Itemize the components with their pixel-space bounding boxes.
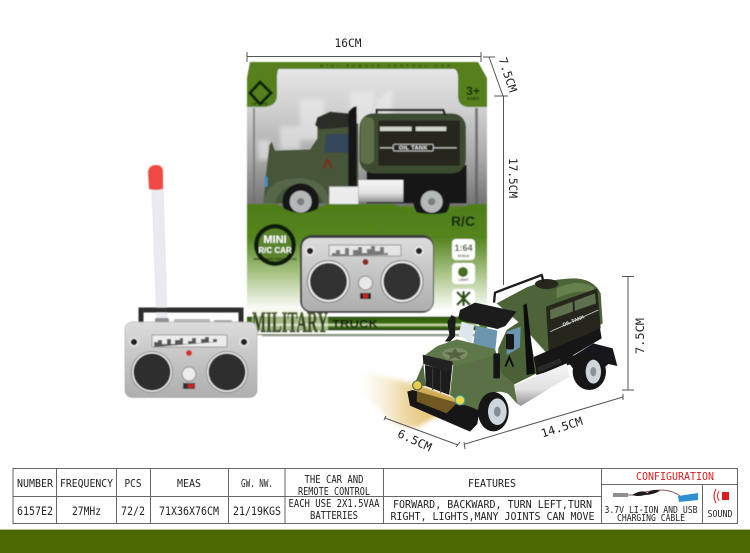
- value: number: 6157E2: [17, 504, 53, 518]
- badge caption: MINI REMOTE CONTROL CAR: [254, 257, 297, 261]
- cab roof: [315, 112, 357, 129]
- roof rail: [494, 275, 544, 303]
- scale badge: [452, 239, 475, 260]
- tank lid: [535, 279, 558, 289]
- window side strips: [253, 108, 255, 204]
- oil tank side label: OIL TANK: [562, 314, 586, 329]
- left green nose: [413, 363, 426, 387]
- top buttons: [174, 319, 210, 326]
- boxed remote led: [362, 259, 368, 265]
- battery note: REMOTE CONTROL: [298, 485, 370, 498]
- truck title: TRUCK: [332, 318, 378, 330]
- silver fuel tank: [358, 180, 403, 202]
- grille: [423, 355, 453, 395]
- door army emblem: [505, 357, 513, 367]
- remote body: [125, 322, 257, 398]
- star emblem: [442, 348, 468, 360]
- value: meas: 71X36X76CM: [159, 504, 219, 518]
- dimension: box depth 7.5CM: [483, 55, 520, 96]
- dimension: box width 16CM: [247, 36, 481, 62]
- handheld remote control: [125, 165, 257, 398]
- features text: RIGHT, LIGHTS,MANY JOINTS CAN MOVE: [390, 510, 594, 523]
- header: frequency: FREQUENCY: [60, 477, 113, 490]
- tank: [497, 278, 603, 355]
- exhaust stack: [523, 303, 535, 375]
- label: 14.5CM: [539, 414, 584, 440]
- skyline silhouettes: [258, 88, 392, 160]
- sound label: SOUND: [708, 509, 732, 520]
- joystick: [182, 367, 196, 381]
- dimension: truck height 7.5CM: [622, 276, 647, 390]
- exhaust stack: [348, 106, 357, 197]
- cab fender: [263, 178, 330, 203]
- front fender: [450, 349, 517, 417]
- boxed truck window: [324, 134, 348, 153]
- age text: 3+: [466, 84, 480, 98]
- bottom green band: [0, 529, 750, 553]
- left knob: [130, 338, 138, 346]
- channels badge: [452, 289, 475, 309]
- boxed remote small knobs: [306, 247, 314, 255]
- tank cage: [546, 288, 601, 351]
- RC label: R/C: [451, 213, 475, 229]
- icon: charging cable and battery: [613, 490, 698, 502]
- top flap text: MINI REMOTE CONTROL CAR: [320, 64, 450, 68]
- label: 6.5CM: [395, 426, 434, 454]
- cable caption: [604, 505, 698, 524]
- equalizer display: [152, 335, 227, 347]
- red led: [186, 350, 192, 356]
- box bottom shadow: [262, 335, 482, 336]
- header: number: NUMBER: [17, 477, 53, 490]
- antenna base: [155, 318, 169, 326]
- header: features: FEATURES: [468, 477, 516, 490]
- front wheel: [478, 392, 509, 431]
- label: 7.5CM: [633, 318, 647, 354]
- white area below panel: [247, 316, 479, 334]
- truck title backing: [252, 309, 328, 333]
- hood: [425, 339, 497, 366]
- cable caption: 3.7V LI-ION AND USB: [604, 505, 698, 516]
- mini rc car badge: [254, 224, 296, 266]
- cable caption: CHARGING CABLE: [617, 513, 685, 524]
- boxed rear wheel: [413, 183, 450, 220]
- box top flap and front: [247, 62, 487, 335]
- left speaker: [132, 352, 172, 392]
- icon: red speaker: [714, 489, 729, 503]
- truck rear frame: [567, 343, 617, 373]
- fuel tank straps: [537, 358, 562, 373]
- value: pcs: 72/2: [121, 504, 145, 518]
- label: 17.5CM: [506, 158, 520, 198]
- battery note: BATTERIES: [310, 509, 358, 522]
- boxed remote joystick: [358, 276, 372, 290]
- right headlight: [455, 396, 465, 405]
- cab roof: [458, 303, 517, 329]
- tank roof rail: [377, 110, 445, 115]
- features text: [390, 498, 594, 523]
- boxed truck tank: [359, 113, 466, 173]
- battery note: THE CAR AND: [304, 473, 364, 486]
- boxed remote left speaker: [308, 260, 350, 302]
- right speaker: [206, 352, 248, 392]
- battery note: [288, 473, 380, 522]
- battery note: EACH USE 2X1.5VAA: [288, 497, 380, 510]
- light badge: [452, 263, 475, 284]
- dimension: truck width 6.5CM: [384, 416, 460, 454]
- value: gw nw: 21/19KGS: [233, 504, 281, 518]
- door mirror: [506, 334, 514, 349]
- right knob: [240, 338, 248, 346]
- green lower panel with wheel arches: [247, 204, 487, 316]
- boxed remote switch: [360, 293, 371, 299]
- logo mark: [250, 82, 271, 104]
- beam glow over bumper: [417, 385, 460, 413]
- bumper: [407, 390, 479, 432]
- side mirror: [445, 315, 456, 342]
- right side buttons: [214, 320, 232, 326]
- boxed remote: [300, 235, 434, 313]
- power switch: [183, 383, 195, 389]
- boxed remote display: [329, 245, 401, 256]
- oil tank plate: [393, 144, 433, 151]
- boxed truck: [263, 106, 467, 220]
- boxed front wheel: [282, 183, 319, 220]
- value: frequency: 27MHz: [72, 504, 101, 518]
- tank highlight: [557, 283, 595, 298]
- box window: [247, 69, 487, 206]
- door window: [507, 327, 521, 355]
- scale label: SCALE: [458, 254, 470, 258]
- header: meas: MEAS: [177, 477, 201, 490]
- left headlight: [413, 381, 422, 390]
- cab side: [497, 317, 537, 390]
- antenna: [152, 188, 167, 322]
- scale text: 1:64: [454, 243, 473, 253]
- silver fuel tank: [515, 363, 569, 406]
- header: configuration: CONFIGURATION: [636, 470, 714, 483]
- dark frame under tank: [527, 328, 602, 375]
- headlight beams: [360, 371, 460, 428]
- badge text: R/C CAR: [258, 246, 292, 255]
- handle: [141, 310, 241, 326]
- windshield right: [473, 326, 497, 349]
- features text: FORWARD, BACKWARD, TURN LEFT,TURN: [393, 498, 592, 511]
- blue headlight: [264, 177, 268, 187]
- silver step: [329, 187, 358, 205]
- boxed truck cab: [263, 123, 358, 203]
- boxed remote right speaker: [381, 260, 423, 302]
- package box: MILITARY: [252, 306, 328, 339]
- label: 16CM: [334, 36, 362, 50]
- army emblem: [323, 159, 332, 168]
- windshield left: [459, 322, 474, 343]
- boxed truck chassis: [367, 165, 467, 203]
- label: 7.5CM: [496, 55, 520, 94]
- antenna red tip: [148, 165, 163, 190]
- header: gw nw: GW. NW.: [241, 477, 273, 490]
- military stripe: [247, 316, 477, 330]
- specification table: [13, 468, 738, 524]
- header: pcs: PCS: [124, 477, 142, 490]
- rear wheel: [573, 353, 606, 390]
- foreground truck: [407, 275, 617, 432]
- side vent: [493, 353, 500, 378]
- light label: LIGHT: [458, 278, 470, 282]
- dimension: truck length 14.5CM: [464, 394, 623, 449]
- oil tank label: OIL TANK: [399, 146, 428, 152]
- package box: [247, 62, 487, 339]
- logo caption: VP TOYS: [252, 102, 268, 106]
- ages label: AGES: [467, 96, 479, 101]
- badge text: MINI: [263, 234, 287, 246]
